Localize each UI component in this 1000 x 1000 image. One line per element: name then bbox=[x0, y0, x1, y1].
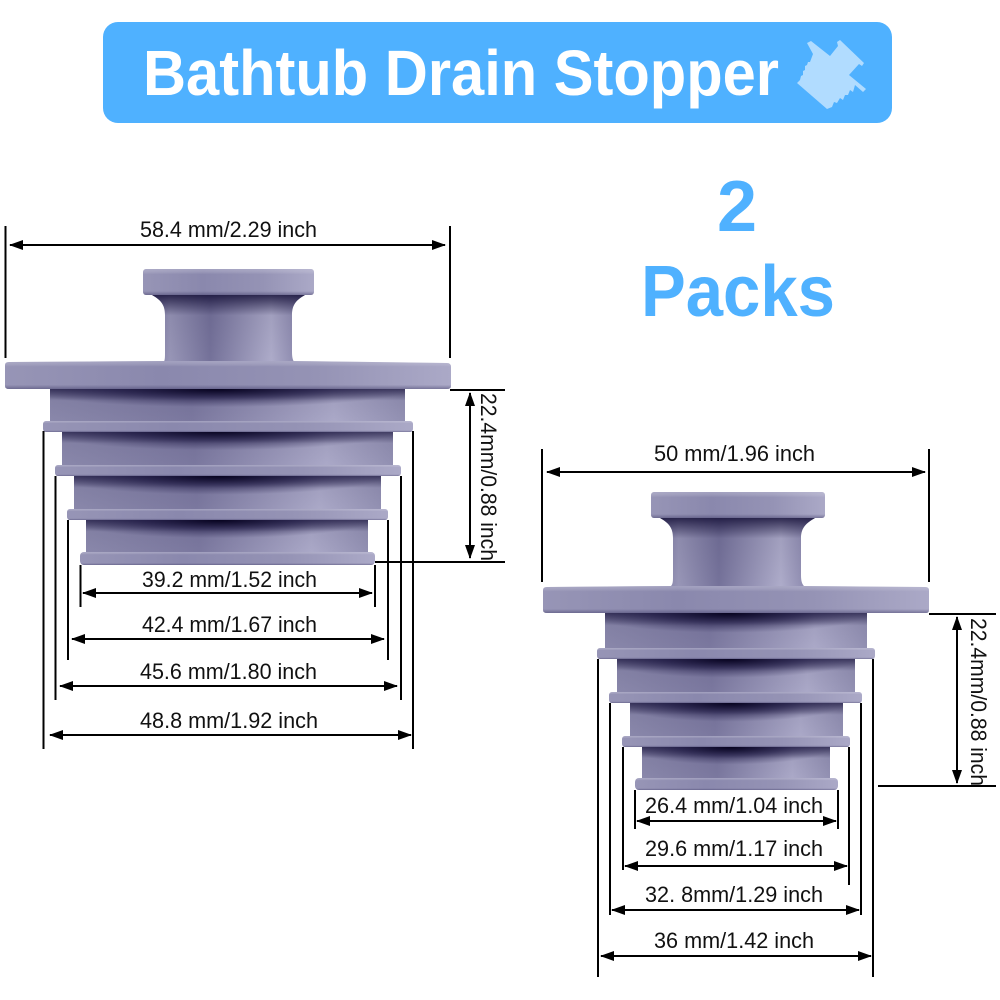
dimension: right 26.4 mm: 26.4 mm/1.04 inch bbox=[645, 793, 823, 818]
dimension: left 42.4 mm bbox=[68, 520, 388, 660]
dimension: right overall width: 50 mm/1.96 inch bbox=[654, 441, 815, 466]
rings bbox=[43, 421, 413, 565]
dimension: left 45.6 mm bbox=[56, 476, 401, 700]
dimension: left overall width bbox=[6, 217, 450, 358]
dimension: right 29.6 mm: 29.6 mm/1.17 inch bbox=[645, 836, 823, 861]
icon: drain stopper silhouette bbox=[797, 40, 866, 109]
dimension: right height: 22.4mm/0.88 inch bbox=[966, 618, 991, 786]
dimension: left overall width: 58.4 mm/2.29 inch bbox=[140, 217, 317, 242]
dimension: left height bbox=[375, 390, 505, 562]
top cap bbox=[651, 492, 825, 518]
neck bbox=[152, 295, 305, 363]
dimension: right 32.8 mm: 32. 8mm/1.29 inch bbox=[645, 882, 823, 907]
rings bbox=[597, 648, 875, 790]
title banner bbox=[103, 22, 892, 123]
heading: 2 Packs: Packs bbox=[641, 252, 835, 332]
top cap bbox=[143, 269, 314, 295]
dimension: right 36 mm bbox=[598, 659, 873, 977]
dimension: left 39.2 mm bbox=[80, 565, 375, 607]
dimension: right 36 mm: 36 mm/1.42 inch bbox=[654, 928, 814, 953]
dimension: left height: 22.4mm/0.88 inch bbox=[476, 393, 501, 561]
dimension: right 26.4 mm bbox=[635, 790, 838, 829]
dimension: right 32.8 mm bbox=[610, 703, 861, 915]
title text: Bathtub Drain Stopper bbox=[143, 37, 779, 109]
dimension: left 39.2 mm: 39.2 mm/1.52 inch bbox=[142, 567, 317, 592]
dimension: right overall width bbox=[542, 441, 929, 582]
heading: 2 Packs bbox=[641, 167, 835, 332]
dimension: left 45.6 mm: 45.6 mm/1.80 inch bbox=[140, 659, 317, 684]
heading: 2 Packs: 2 bbox=[717, 167, 757, 247]
dimension: left 48.8 mm bbox=[44, 431, 413, 749]
right stopper product bbox=[543, 492, 929, 790]
dimension: left 42.4 mm: 42.4 mm/1.67 inch bbox=[142, 612, 317, 637]
dimension: right 29.6 mm bbox=[623, 747, 849, 885]
cylinder tiers bbox=[605, 613, 867, 779]
flange bbox=[5, 361, 451, 389]
dimension: left 48.8 mm: 48.8 mm/1.92 inch bbox=[140, 708, 318, 733]
cylinder tiers bbox=[50, 389, 405, 553]
dimension: right height bbox=[878, 614, 996, 786]
flange bbox=[543, 586, 929, 613]
left stopper product bbox=[5, 269, 451, 565]
neck bbox=[660, 518, 815, 586]
